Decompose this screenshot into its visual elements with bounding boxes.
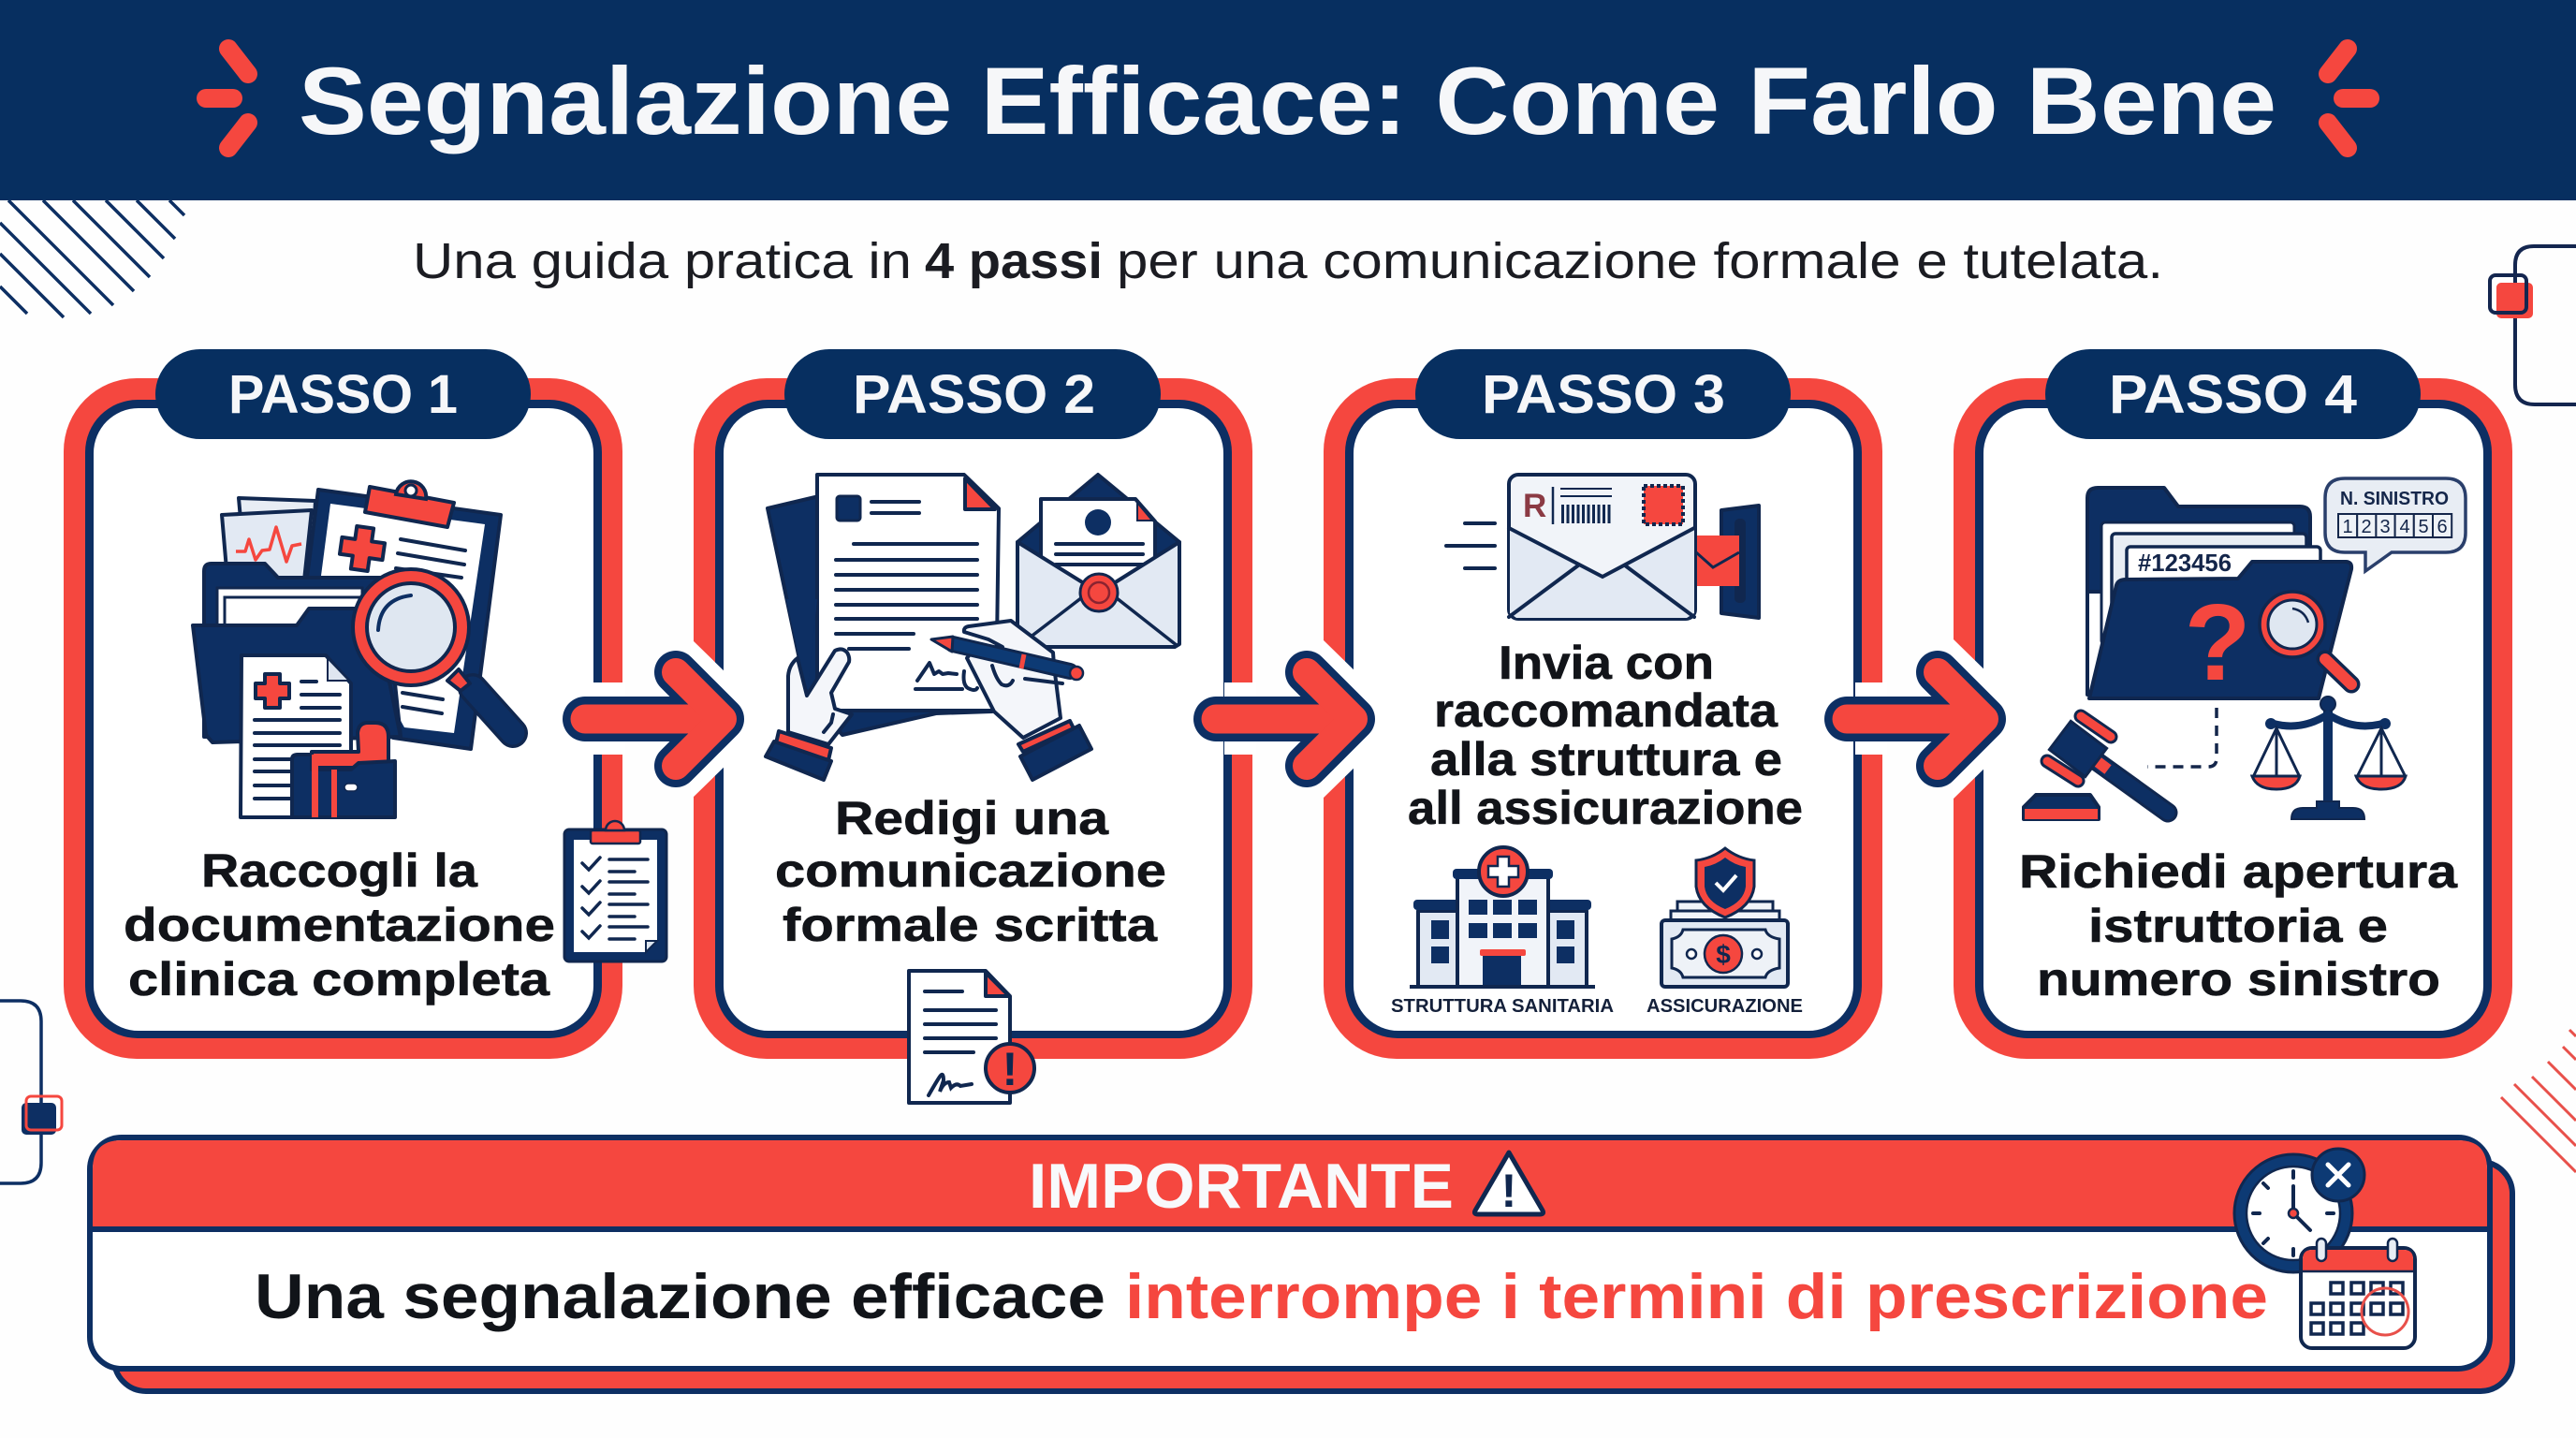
- icon: scales of justice: [2252, 697, 2406, 819]
- step 1 badge: [155, 349, 531, 439]
- icon: signed document with alert: !: [1003, 1043, 1017, 1095]
- left hand: [788, 649, 852, 744]
- step 1 text: clinica completa: [128, 953, 550, 1005]
- step 2 text: formale scritta: [783, 899, 1158, 951]
- icon: letter, signing hands and envelope: [766, 475, 1179, 780]
- step 3 text: Invia con: [1499, 637, 1714, 689]
- icon: hospital building: [1410, 847, 1595, 987]
- step 4 text: istruttoria e: [2088, 900, 2388, 952]
- decoration: navy hatch top left: [0, 200, 184, 317]
- step 1 text: Raccogli la: [201, 844, 478, 897]
- decoration: top right bracket: [2490, 246, 2576, 404]
- speech bubble: claim number: N. SINISTRO: [2340, 489, 2449, 509]
- banner message: interrompe i termini di prescrizione: [1125, 1261, 2268, 1332]
- insurance label: ASSICURAZIONE: [1647, 996, 1803, 1017]
- icon: registered letter into mailbox: [1446, 475, 1759, 619]
- icon: signed document with alert: [909, 971, 1034, 1103]
- icon: warning triangle: [1474, 1152, 1544, 1217]
- step 3 badge: [1415, 349, 1791, 439]
- icon: insurance shield and money: [1661, 848, 1788, 987]
- icon: warning triangle: !: [1501, 1165, 1516, 1217]
- speech bubble: claim number: 1: [2342, 517, 2353, 537]
- subtitle: 4 passi: [925, 233, 1103, 289]
- banner message: [255, 1261, 2268, 1332]
- icon: clock: [2234, 1149, 2364, 1272]
- icon: gavel: [2024, 716, 2168, 819]
- step 1 text: documentazione: [124, 899, 555, 951]
- step 2 text: comunicazione: [775, 844, 1166, 897]
- banner heading: IMPORTANTE: [1029, 1151, 1454, 1222]
- question mark: ?: [2185, 581, 2250, 703]
- subtitle: Una guida pratica in: [413, 233, 912, 289]
- speech bubble: claim number: 4: [2399, 517, 2410, 537]
- icon: calendar: [2301, 1239, 2415, 1348]
- arrow: step 2 to step 3: [1216, 638, 1404, 800]
- case number: #123456: [2138, 549, 2232, 577]
- step 3 text: all assicurazione: [1408, 782, 1803, 834]
- step 4 badge: PASSO 4: [2109, 364, 2357, 425]
- panel: step 3: [1324, 349, 1882, 1059]
- icon: registered letter into mailbox: R: [1523, 488, 1546, 524]
- speech bubble: claim number: 5: [2418, 517, 2429, 537]
- step 4 text: Richiedi apertura: [2019, 845, 2458, 898]
- step 2 text: [775, 792, 1166, 951]
- right hand with pen: [964, 621, 1061, 738]
- icon: case folder with question mark: [2087, 488, 2351, 703]
- panel: step 1: [64, 349, 622, 1059]
- step 4 badge: [2045, 349, 2421, 439]
- speech bubble: claim number: 3: [2379, 517, 2391, 537]
- panel: step 4: [1954, 349, 2512, 1059]
- step 1 text: [124, 844, 555, 1005]
- step 1 badge: PASSO 1: [228, 364, 458, 425]
- envelope: [1017, 475, 1179, 647]
- dashed connector: [2147, 708, 2217, 767]
- decoration: red hatch bottom right: [2501, 1030, 2576, 1172]
- arrow: step 1 to step 2: [585, 638, 773, 800]
- panel: step 2: [694, 349, 1252, 1059]
- icon: insurance shield and money: $: [1716, 940, 1731, 969]
- callout: important banner: [90, 1137, 2512, 1391]
- icon: medical folder and magnifier: [193, 481, 513, 817]
- banner message: Una segnalazione efficace: [255, 1261, 1105, 1332]
- icon: right title sparks: [2328, 49, 2370, 148]
- speech bubble: claim number: 6: [2437, 517, 2448, 537]
- decoration: bottom left bracket: [0, 1001, 62, 1183]
- subtitle: per una comunicazione formale e tutelata.: [1117, 233, 2163, 289]
- step 3 badge: PASSO 3: [1482, 364, 1725, 425]
- speech bubble: claim number: [2325, 478, 2466, 571]
- step 4 text: [2019, 845, 2458, 1005]
- step 2 text: Redigi una: [835, 792, 1109, 844]
- step 3 text: raccomandata: [1434, 684, 1778, 737]
- step 3 text: alla struttura e: [1430, 733, 1782, 785]
- arrow: step 3 to step 4: [1847, 638, 2035, 800]
- speech bubble: claim number: 2: [2361, 517, 2372, 537]
- step 2 badge: PASSO 2: [853, 364, 1095, 425]
- subtitle: [413, 233, 2163, 289]
- step 4 text: numero sinistro: [2037, 953, 2440, 1005]
- step 3 text: [1408, 637, 1803, 834]
- header band: [0, 0, 2576, 200]
- icon: checklist clipboard: [564, 821, 666, 961]
- icon: left title sparks: [206, 49, 248, 148]
- hospital label: STRUTTURA SANITARIA: [1391, 996, 1614, 1017]
- step 2 badge: [784, 349, 1161, 439]
- title: Segnalazione Efficace: Come Farlo Bene: [299, 48, 2276, 154]
